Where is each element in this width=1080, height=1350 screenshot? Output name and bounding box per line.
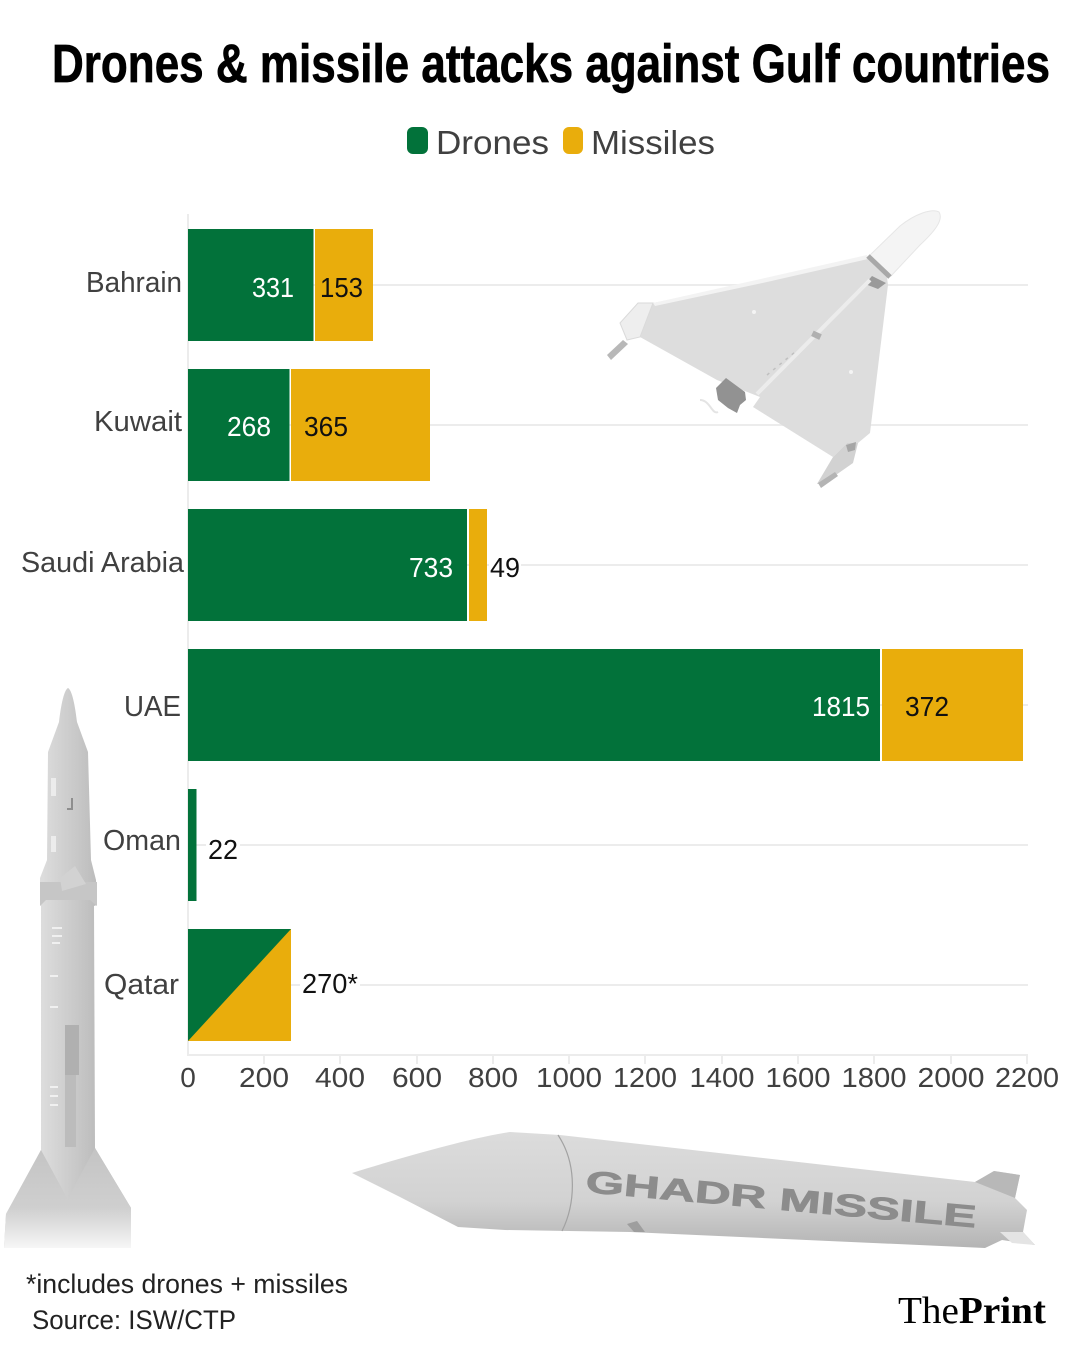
x axis labels: 1200 xyxy=(613,1062,677,1093)
x axis labels: 600 xyxy=(392,1062,442,1093)
row: Kuwait xyxy=(94,369,430,481)
x axis labels: 0 xyxy=(180,1062,196,1093)
row: Saudi Arabia xyxy=(21,509,521,621)
source: Source: ISW/CTP xyxy=(32,1305,236,1335)
row: Bahrain xyxy=(86,229,373,341)
image: ghadr missile xyxy=(352,1132,1035,1248)
x axis labels: 200 xyxy=(239,1062,289,1093)
row: Qatar: Qatar xyxy=(104,969,179,1001)
row: Kuwait: Kuwait xyxy=(94,406,182,438)
row: Kuwait: 365 xyxy=(304,411,348,442)
x axis labels: 400 xyxy=(315,1062,365,1093)
row: Saudi Arabia: Saudi Arabia xyxy=(21,547,185,579)
row: UAE: UAE xyxy=(124,691,181,723)
logo: ThePrint: ThePrint xyxy=(898,1290,1046,1332)
row: Bahrain: Bahrain xyxy=(86,267,182,299)
image: shahed drone xyxy=(607,211,940,488)
row: UAE: 1815 xyxy=(812,691,870,722)
row: Saudi Arabia: 49 xyxy=(490,552,520,583)
row: Qatar xyxy=(104,929,360,1041)
row: UAE xyxy=(124,649,1023,761)
x axis labels: 1400 xyxy=(690,1062,754,1093)
row: Oman: Oman xyxy=(103,825,181,857)
legend xyxy=(407,124,715,161)
x axis labels: 2000 xyxy=(918,1062,984,1093)
row: Qatar: 270* xyxy=(302,968,358,999)
x axis labels: 2200 xyxy=(995,1062,1059,1093)
row: Bahrain: 153 xyxy=(320,272,363,303)
row: UAE: 372 xyxy=(905,691,949,722)
row: Kuwait: 268 xyxy=(227,411,271,442)
x axis labels: 1800 xyxy=(842,1062,906,1093)
chart gridlines and axes xyxy=(188,214,1028,1064)
footnote: *includes drones + missiles xyxy=(26,1269,348,1299)
x axis labels: 1600 xyxy=(766,1062,830,1093)
row: Saudi Arabia: 733 xyxy=(409,552,453,583)
missile lettering: GHADR MISSILE xyxy=(584,1164,978,1234)
row: Bahrain: 331 xyxy=(252,272,294,303)
row: Oman: 22 xyxy=(208,834,238,865)
legend: missiles: Missiles xyxy=(591,124,715,161)
x axis labels: 800 xyxy=(468,1062,518,1093)
image: vertical missile xyxy=(4,688,131,1248)
row: Oman xyxy=(103,789,240,901)
legend: drones: Drones xyxy=(436,124,549,161)
x axis labels xyxy=(180,1062,1059,1093)
x axis labels: 1000 xyxy=(536,1062,602,1093)
